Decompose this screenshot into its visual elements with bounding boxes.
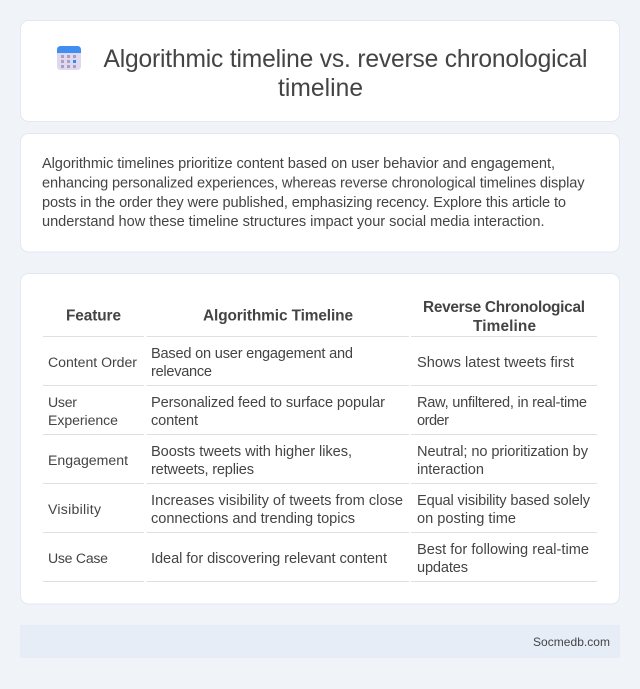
title [104, 46, 588, 102]
row: use case: Best for following real-time [417, 542, 589, 558]
table header: Reverse Chronological [423, 299, 585, 316]
row: engagement: interaction [417, 462, 484, 478]
row: visibility: Increases visibility of tweets from close [151, 493, 403, 509]
table header [66, 299, 585, 335]
title: Algorithmic timeline vs. reverse chronological [104, 46, 588, 73]
footer: Socmedb.com [533, 635, 610, 649]
intro paragraph: posts in the order they were published, emphasizing recency. Explore this article to [42, 195, 566, 211]
row: visibility: connections and trending topics [151, 511, 355, 527]
table header: Timeline [473, 318, 536, 335]
title: timeline [278, 75, 363, 102]
panel: comparison table [20, 274, 620, 604]
row: content order: Shows latest tweets first [417, 355, 574, 371]
row: use case: updates [417, 560, 468, 576]
row: content order: Based on user engagement and [151, 346, 353, 362]
intro paragraph: enhancing personalized experiences, whereas reverse chronological timelines display [42, 176, 585, 192]
footer [20, 625, 620, 658]
row: user experience: Personalized feed to surface popular [151, 395, 385, 411]
row: visibility [48, 493, 591, 527]
table header: Algorithmic Timeline [203, 308, 353, 324]
icon: calendar [57, 46, 81, 70]
row: user experience: order [417, 413, 449, 429]
panel: intro text [20, 134, 620, 252]
row: visibility: Visibility [48, 501, 102, 517]
intro paragraph [42, 156, 585, 230]
row: content order: Content Order [48, 354, 137, 370]
row: content order: relevance [151, 364, 212, 380]
row: user experience: Experience [48, 412, 118, 428]
row: engagement: retweets, replies [151, 462, 254, 478]
row: visibility: Equal visibility based solely [417, 493, 591, 509]
row: user experience [48, 394, 587, 429]
row: use case: Ideal for discovering relevant content [151, 551, 387, 567]
row: engagement: Boosts tweets with higher likes, [151, 444, 352, 460]
row: use case: Use Case [48, 550, 108, 566]
intro paragraph: Algorithmic timelines prioritize content based on user behavior and engagement, [42, 156, 555, 172]
row: engagement [48, 444, 589, 478]
row: user experience: User [48, 394, 77, 410]
row: content order [48, 346, 574, 380]
row: use case [48, 542, 589, 576]
row: user experience: content [151, 413, 198, 429]
row: visibility: on posting time [417, 511, 516, 527]
panel: title card [20, 20, 620, 122]
row: engagement: Engagement [48, 452, 128, 468]
table header: Feature [66, 308, 121, 324]
row: user experience: Raw, unfiltered, in real-time [417, 395, 587, 411]
row: engagement: Neutral; no prioritization by [417, 444, 589, 460]
intro paragraph: understand how these timeline structures impact your social media interaction. [42, 214, 544, 230]
